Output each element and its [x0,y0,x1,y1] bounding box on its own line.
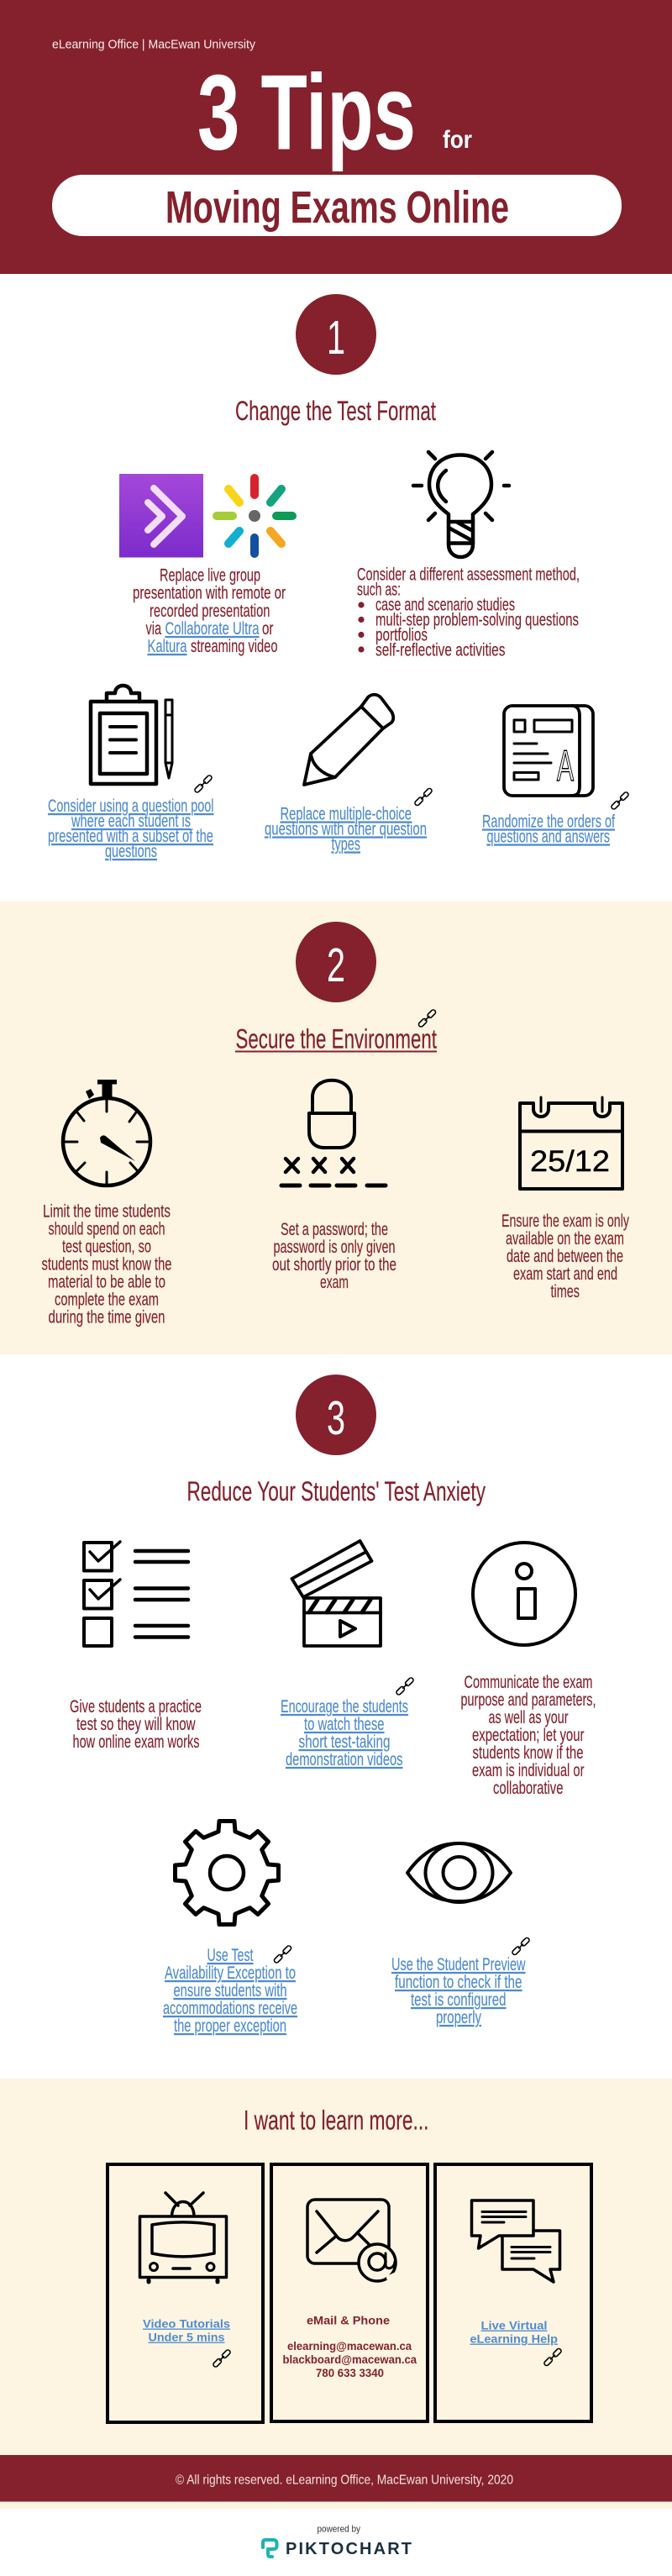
section 3: reduce test anxiety [70,1375,596,2036]
panel: email and phone [271,2164,428,2421]
text: ensure the exam [501,1212,629,1301]
heading: reduce your students' test anxiety: Reduce Your Students' Test Anxiety [186,1476,486,1506]
icon: calendar [520,1097,622,1189]
link text: replace multiple choice: questions with other question [265,820,427,839]
text: set a password [272,1220,396,1292]
text: set a password: exam [320,1273,349,1292]
text: different assessment methods: multi-step problem-solving questions [375,610,579,630]
section 4: learn more [0,2079,672,2509]
link icon [417,1009,437,1028]
link text: question pool: Consider using a question pool [48,796,213,816]
text: email and phone details: elearning@macewan.ca [287,2340,412,2353]
header banner [0,0,672,274]
link icon [273,1945,292,1964]
link text: student preview: test is configured [411,1990,506,2010]
number badge 2 [296,922,376,1002]
icon: clipboard and pencil [91,686,172,784]
link text: live virtual help: Live Virtual [480,2319,548,2332]
link text: demonstration videos: to watch these [304,1715,385,1734]
text: different assessment methods: case and scenario studies [375,595,515,615]
link text: student preview: Use the Student Preview [391,1955,526,1974]
icon: information [473,1543,575,1645]
text: ensure the exam: date and between the [507,1247,623,1266]
text: set a password: out shortly prior to the [272,1255,396,1275]
text: email and phone details: blackboard@macewan.ca [282,2353,417,2366]
link text: student preview: properly [436,2008,481,2027]
link text: live virtual help: eLearning Help [470,2332,558,2346]
text: different assessment methods: portfolios [375,625,428,645]
text: limit the time: Limit the time students [43,1201,171,1222]
icon: padlock and password [281,1080,386,1185]
wordmark: PIKTOCHART [286,2540,412,2558]
text: ensure the exam: times [551,1282,580,1301]
number badge 1: 1 [327,311,345,365]
icon: pencil [304,695,393,785]
calendar date: 25/12 [530,1145,610,1178]
link text: video tutorials: Video Tutorials [143,2317,230,2331]
text: different assessment methods: self-reflective activities [375,640,506,660]
heading: i want to learn more: I want to learn more... [244,2105,428,2136]
link text: replace multiple choice: Replace multiple-choice [281,805,412,823]
link text: question pool: questions [105,842,157,861]
text: limit the time: test question, so [62,1237,151,1257]
number badge 3: 3 [327,1391,345,1445]
text: replace live group presentation: via [146,619,161,639]
footer band: © All rights reserved. eLearning Office, MacEwan University, 2020 [176,2473,513,2487]
link icon [512,1937,530,1956]
panel: video tutorials [108,2164,263,2422]
text: limit the time: complete the exam [55,1291,159,1309]
title: 3 Tips: 3 Tips [197,52,416,171]
link text: question pool [48,796,213,861]
link text: test availability exception: ensure students with [173,1981,287,2000]
link text: randomize: Randomize the orders of [482,812,615,832]
text: practice test: Give students a practice [70,1697,202,1716]
text: replace live group presentation: streaming video [191,637,277,656]
link text: test availability exception: Availability Exception to [165,1964,296,1983]
icon: stopwatch [63,1080,150,1185]
link text: demonstration videos [281,1697,408,1769]
text: replace live group presentation [133,566,286,656]
text: limit the time: during the time given [49,1307,165,1327]
link text: question pool: presented with a subset of the [48,827,213,846]
link text: randomize: questions and answers [487,827,610,847]
text: ensure the exam: exam start and end [513,1264,617,1284]
link text: video tutorials [143,2317,230,2344]
text: practice test: how online exam works [72,1732,200,1752]
subtitle pill: Moving Exams Online [165,182,509,233]
text: replace live group presentation: recorded presentation [150,602,270,621]
text: different assessment methods: such as: [357,580,401,600]
text: practice test: test so they will know [76,1715,196,1734]
link text: test availability exception: accommodations receive [163,1999,297,2018]
icon: collaborate ultra logo [119,474,203,558]
text: replace live group presentation: presentation with remote or [133,583,286,603]
number badge 2: 2 [327,938,345,992]
icon: piktochart logo [263,2540,277,2557]
panel: live virtual help [435,2164,591,2421]
section 2: secure the environment [0,902,672,1354]
icon: test booklet [504,706,593,796]
text: communicate the exam: purpose and parameters, [460,1690,596,1710]
link icon [611,791,629,810]
icon: eye [407,1843,511,1902]
text: replace live group presentation: or [262,619,274,639]
text: set a password: password is only given [274,1238,395,1257]
link text: test availability exception [163,1946,297,2036]
section 1: change the test format [48,294,629,861]
text: communicate the exam: as well as your [489,1708,569,1727]
icon: chat bubbles [472,2200,559,2282]
link text: demonstration videos: short test-taking [299,1732,390,1752]
text: limit the time: students must know the [42,1255,171,1274]
icon: television [139,2193,227,2282]
text: communicate the exam [460,1673,596,1798]
organisation line: eLearning Office | MacEwan University [52,39,256,52]
link text: test availability exception: the proper exception [174,2016,286,2036]
link icon [213,2349,231,2368]
text: email and phone details: 780 633 3340 [316,2367,384,2379]
icon: checklist [84,1542,188,1646]
text: different assessment methods [357,565,580,660]
text: limit the time: material to be able to [48,1272,165,1292]
number badge 1 [296,294,376,375]
link text: demonstration videos: demonstration videos [286,1750,403,1769]
link text: question pool: where each student is [71,812,191,831]
link icon [414,787,433,807]
title: for: for [443,126,472,154]
icon: gear [175,1822,279,1924]
text: communicate the exam: exam is individual or [472,1761,585,1780]
footer band [0,2455,672,2502]
text: communicate the exam: Communicate the exam [464,1673,593,1692]
link icon [543,2347,562,2367]
heading: secure the environment: Secure the Environment [235,1023,437,1054]
subtitle pill [52,175,622,236]
text: communicate the exam: expectation; let your [472,1726,585,1745]
heading: change the test format: Change the Test Format [235,396,436,426]
icon: envelope with at sign [307,2200,396,2281]
link icon [396,1677,414,1695]
text: replace live group presentation: Replace live group [160,566,260,585]
link text: student preview [391,1955,526,2027]
text: different assessment methods: Consider a different assessment method, [357,565,580,585]
text: practice test [70,1697,202,1752]
link text: demonstration videos: Encourage the students [281,1697,408,1716]
text: set a password: Set a password; the [281,1220,388,1239]
text: limit the time [42,1201,171,1327]
text: email and phone details: eMail & Phone [307,2314,391,2327]
text: communicate the exam: collaborative [493,1779,563,1798]
text: communicate the exam: students know if the [472,1743,583,1763]
powered by piktochart [263,2524,412,2558]
icon: light bulb [413,452,509,557]
text: limit the time: should spend on each [49,1220,165,1238]
number badge 3 [296,1375,376,1455]
link text: video tutorials: Under 5 mins [148,2331,225,2344]
icon: kaltura logo [217,478,292,554]
text: replace live group presentation: Collaborate Ultra [165,619,260,639]
link text: student preview: function to check if the [395,1973,522,1992]
link text: replace multiple choice: types [331,835,360,854]
text: replace live group presentation: Kaltura [148,637,187,656]
link icon [194,775,213,793]
link text: randomize [482,812,615,847]
powered by piktochart: powered by [318,2524,360,2534]
icon: clapperboard [292,1541,381,1646]
link text: test availability exception: Use Test [207,1946,254,1965]
link text: replace multiple choice [265,805,427,854]
icon letter: A: A [557,742,574,791]
link text: live virtual help [470,2319,558,2346]
text: email and phone details [282,2314,417,2379]
